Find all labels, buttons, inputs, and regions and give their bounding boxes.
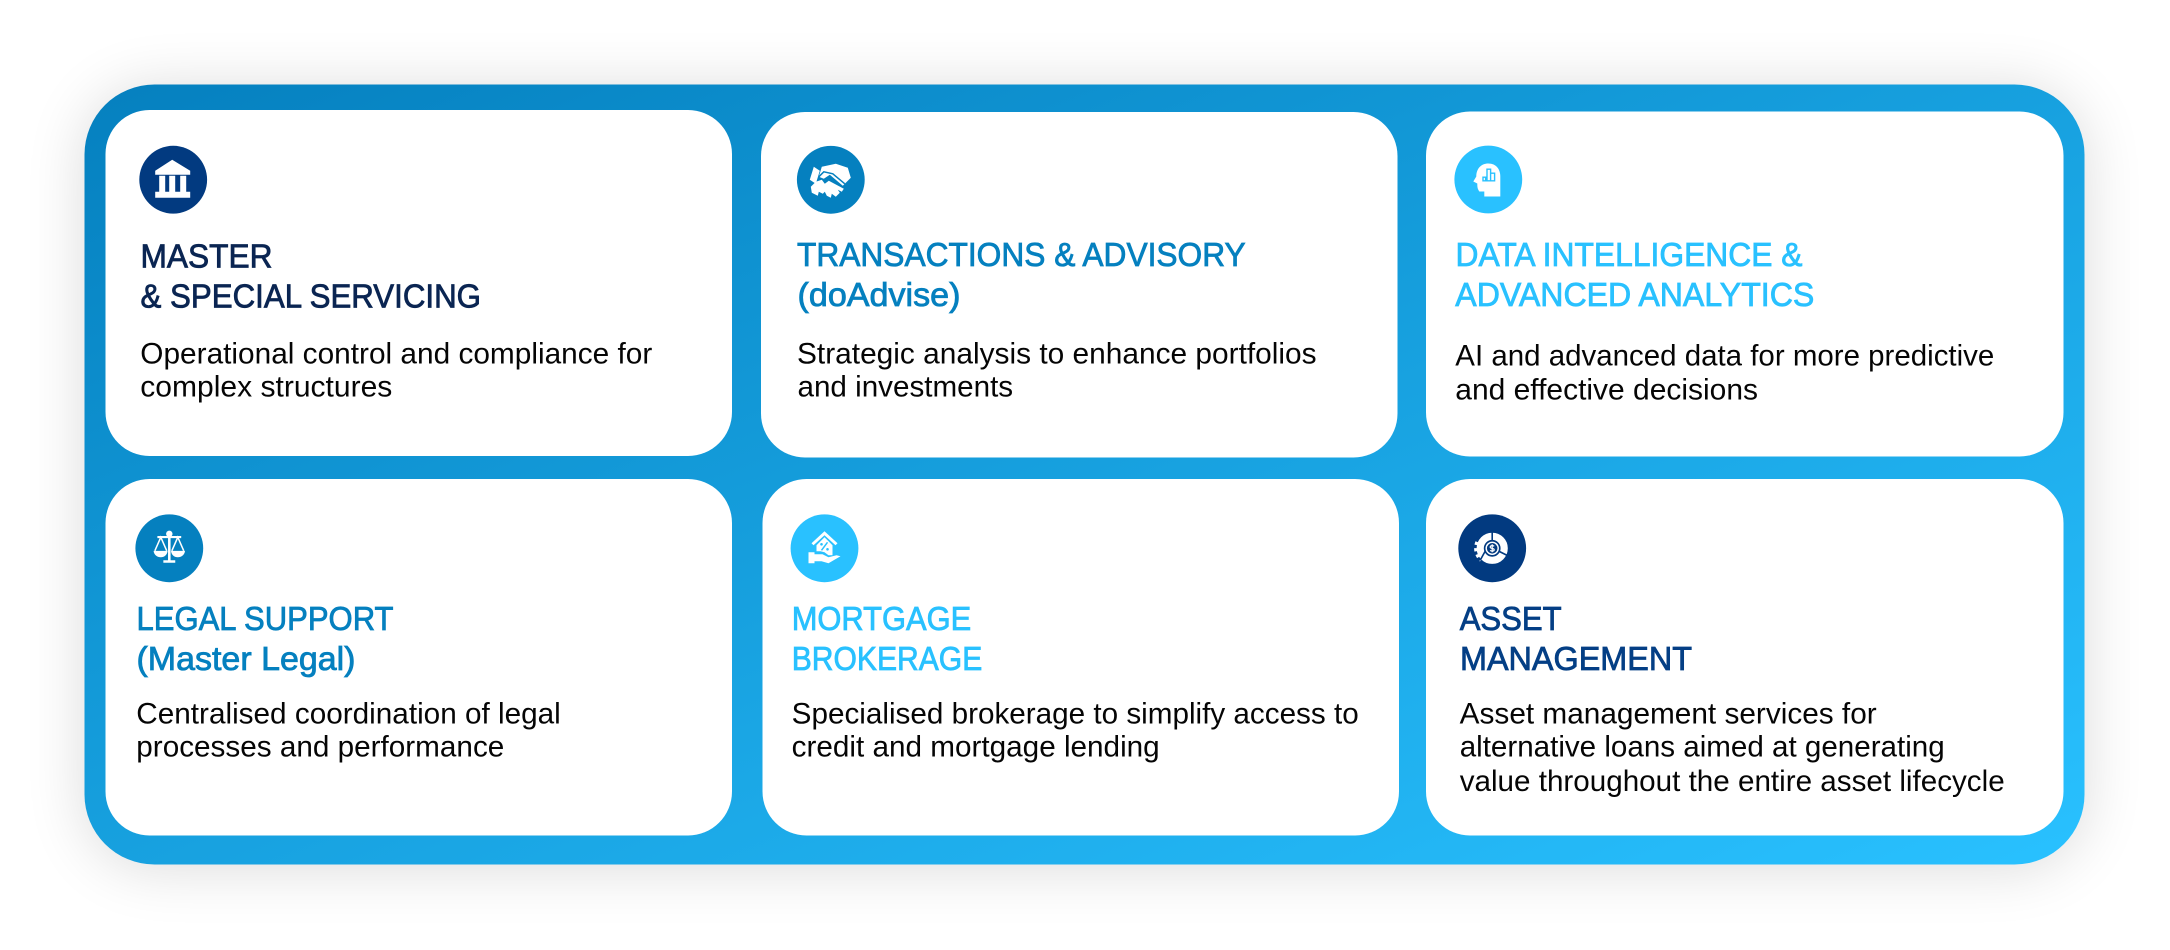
- panel: mortgage brokerage: [762, 479, 1399, 836]
- icon: scales of justice: [135, 514, 203, 582]
- icon: head with chart: [1454, 146, 1522, 213]
- panel shadow: [84, 88, 2084, 868]
- panel: gradient background: [84, 84, 2084, 864]
- description: Asset management services for: [1460, 697, 1877, 730]
- heading: BROKERAGE: [792, 641, 982, 678]
- panel: data intelligence: [1426, 112, 2064, 456]
- description: Specialised brokerage to simplify access to: [792, 697, 1359, 730]
- description: alternative loans aimed at generating: [1460, 731, 1945, 764]
- description: and investments: [798, 371, 1013, 404]
- description: Strategic analysis to enhance portfolios: [797, 337, 1317, 370]
- icon: house in hand: [791, 514, 858, 582]
- heading: & SPECIAL SERVICING: [140, 278, 481, 315]
- heading: MANAGEMENT: [1460, 641, 1692, 678]
- panel: master and special servicing: [106, 110, 732, 456]
- heading: DATA INTELLIGENCE &: [1456, 237, 1802, 274]
- heading: MORTGAGE: [792, 601, 971, 638]
- heading: ADVANCED ANALYTICS: [1455, 277, 1814, 314]
- heading: MASTER: [140, 238, 272, 275]
- heading: ASSET: [1460, 601, 1562, 638]
- description: value throughout the entire asset lifecycle: [1460, 765, 2005, 798]
- description: processes and performance: [136, 731, 504, 764]
- heading: TRANSACTIONS & ADVISORY: [797, 237, 1246, 274]
- description: AI and advanced data for more predictive: [1455, 340, 1994, 373]
- icon: gear with dollar: [1458, 514, 1526, 582]
- panel: asset management: [1426, 479, 2064, 836]
- heading: LEGAL SUPPORT: [136, 601, 394, 638]
- icon: bank building: [139, 146, 207, 214]
- description: credit and mortgage lending: [792, 731, 1160, 764]
- description: Centralised coordination of legal: [136, 697, 561, 730]
- heading: (Master Legal): [136, 641, 356, 678]
- heading: (doAdvise): [798, 277, 960, 314]
- panel: transactions and advisory: [761, 112, 1398, 458]
- description: Operational control and compliance for: [140, 337, 652, 370]
- icon: handshake: [797, 146, 865, 214]
- description: and effective decisions: [1455, 373, 1758, 406]
- description: complex structures: [140, 371, 392, 404]
- panel: legal support: [106, 479, 732, 836]
